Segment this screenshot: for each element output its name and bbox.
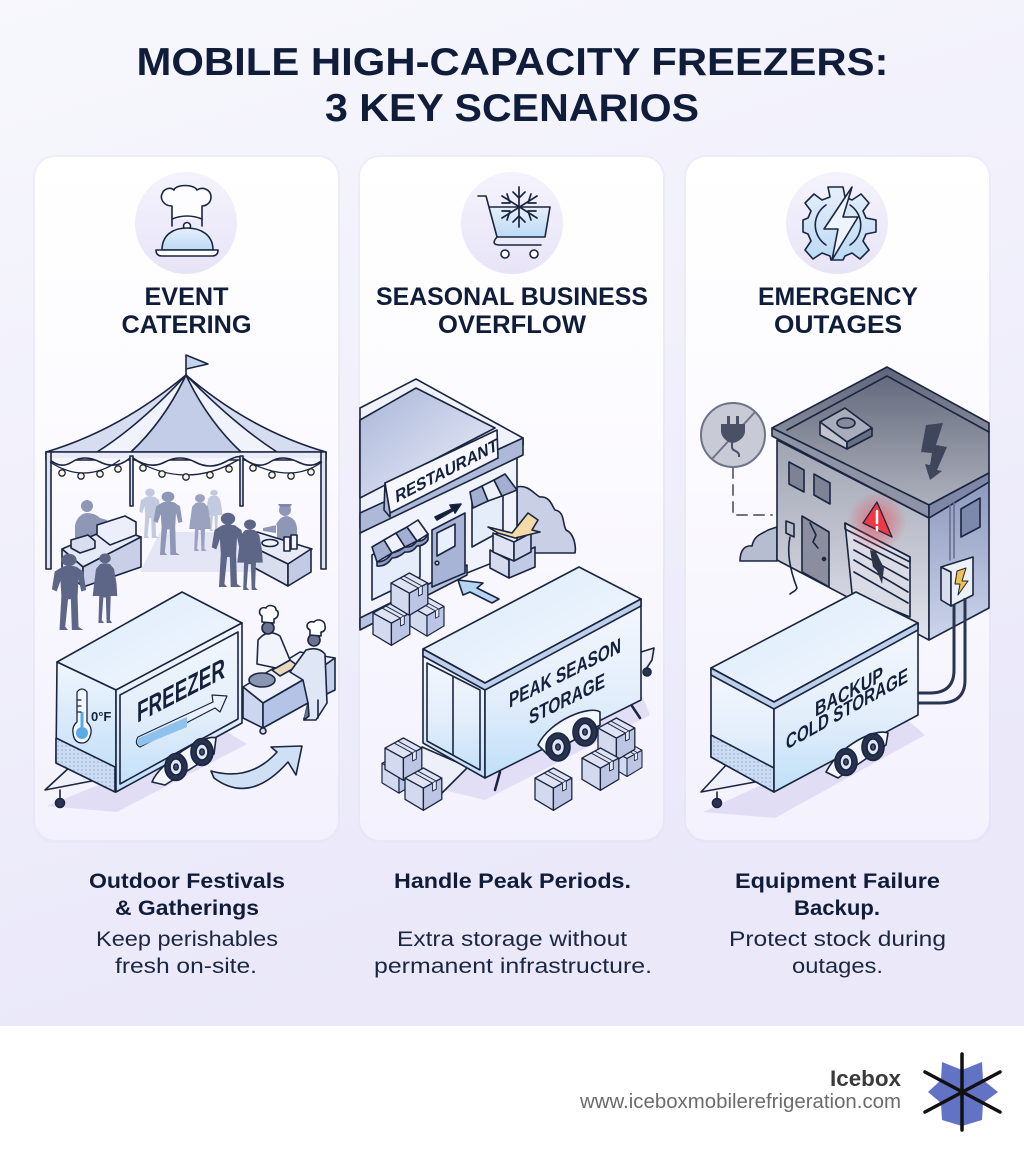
footer brand text: www.iceboxmobilerefrigeration.com: [579, 1091, 901, 1113]
open delivery boxes: [488, 513, 540, 578]
tent poles: [46, 452, 326, 569]
caption: seasonal overflow: Handle Peak Periods.: [394, 869, 631, 893]
left window and awning: [372, 530, 420, 600]
heading: seasonal business overflow: SEASONAL BUSINESS: [376, 283, 648, 311]
caption: emergency outages: outages.: [792, 954, 883, 978]
right food counter: [253, 504, 312, 586]
caption: event catering: & Gatherings: [115, 896, 259, 920]
facade: [360, 455, 517, 628]
caption: event catering: Outdoor Festivals: [89, 869, 285, 893]
flag: [186, 355, 208, 375]
panel: seasonal business overflow: [89, 155, 1000, 1130]
breaker and cord: [786, 521, 794, 537]
arrow on trailer: [136, 695, 227, 747]
footer brand text: Icebox: [830, 1066, 902, 1091]
cargo boxes: [382, 718, 642, 810]
door arrow: [435, 504, 461, 520]
sign: [385, 430, 498, 513]
icon: unplugged warning: [701, 403, 765, 467]
front guests: [52, 513, 263, 630]
roof: [360, 379, 523, 528]
illustration: restaurant: [360, 379, 575, 630]
caption: event catering: Keep perishables: [96, 927, 278, 951]
trailer label: FREEZER: [137, 651, 225, 730]
power cables: [918, 598, 965, 703]
illustration: chefs at prep table: [243, 606, 335, 734]
stabilizer legs: [495, 706, 640, 790]
cloud: [740, 527, 777, 561]
stacked boxes by door: [373, 573, 444, 645]
title: 3 KEY SCENARIOS: [325, 87, 699, 130]
hitch: [45, 765, 97, 800]
ramp: [408, 747, 468, 793]
backup cold storage trailer: [701, 592, 925, 818]
shrub: [517, 486, 575, 553]
windows: [789, 462, 830, 504]
arrow: curved delivery: [211, 746, 302, 788]
wheels: [538, 710, 600, 755]
trailer label: COLD STORAGE: [786, 663, 908, 755]
title: [136, 41, 888, 130]
trailer label: [786, 662, 908, 755]
right window and awning: [472, 490, 503, 547]
wheel arch and wheels: [152, 737, 216, 785]
footer logo: [925, 1054, 1000, 1130]
left food counter: [62, 500, 141, 587]
icon: cart with snowflake: [461, 172, 563, 274]
cracked door: [802, 516, 829, 587]
heading: event catering: [122, 283, 252, 339]
footer band: [0, 1026, 1024, 1154]
heading: emergency outages: [758, 283, 918, 339]
caption: emergency outages: [729, 869, 946, 978]
caption: seasonal overflow: permanent infrastructure.: [374, 954, 652, 978]
background guests: [139, 488, 222, 555]
caption: emergency outages: Backup.: [794, 896, 880, 920]
icon: chef hat and cloche: [135, 172, 237, 274]
caption: emergency outages: Equipment Failure: [735, 869, 940, 893]
warning sign: [847, 492, 907, 552]
hitch: [701, 763, 755, 802]
thermometer: [73, 689, 91, 743]
tent roof: [46, 375, 326, 466]
heading: event catering: EVENT: [144, 283, 228, 311]
conduit and electrical box: [950, 503, 954, 560]
trailer label: [509, 633, 621, 730]
heading: emergency outages: OUTAGES: [774, 311, 902, 339]
illustration: restaurant: RESTAURANT: [395, 434, 499, 507]
fascia: [360, 438, 523, 533]
trailer label: STORAGE: [529, 668, 605, 730]
hitch: [641, 648, 654, 672]
illustration: building without power: [733, 367, 989, 640]
caption: seasonal overflow: Extra storage without: [397, 927, 627, 951]
icon: gear with lightning: [786, 172, 888, 274]
door: [432, 513, 465, 587]
caption: event catering: fresh on-site.: [115, 954, 257, 978]
heading: seasonal business overflow: OVERFLOW: [438, 311, 586, 339]
panel: event catering: [33, 155, 1000, 1130]
illustration: festival tent: [46, 355, 326, 630]
caption: emergency outages: Protect stock during: [729, 927, 946, 951]
title: MOBILE HIGH-CAPACITY FREEZERS:: [136, 41, 888, 84]
roller door: [845, 523, 910, 617]
rooftop hvac unit: [820, 408, 872, 442]
dashed power line: [733, 468, 772, 515]
caption: event catering: [89, 869, 285, 978]
trailer label: BACKUP: [815, 662, 883, 722]
roof lightning bolt: [921, 423, 947, 480]
arrow: to restaurant: [458, 580, 499, 603]
freezer trailer: 0°F: [91, 709, 111, 724]
string lights: [50, 460, 322, 480]
heading: event catering: CATERING: [122, 311, 252, 339]
rear doors: [427, 663, 480, 770]
peak season trailer: [408, 567, 654, 800]
caption: seasonal overflow: [374, 869, 652, 978]
trailer label: PEAK SEASON: [509, 633, 621, 713]
footer brand text: [579, 1066, 902, 1113]
roof: [772, 367, 989, 505]
heading: emergency outages: EMERGENCY: [758, 283, 918, 311]
freezer trailer: [45, 592, 247, 812]
walls: [777, 440, 929, 640]
heading: seasonal business overflow: [376, 283, 648, 339]
panel: emergency outages: [89, 155, 1000, 1130]
